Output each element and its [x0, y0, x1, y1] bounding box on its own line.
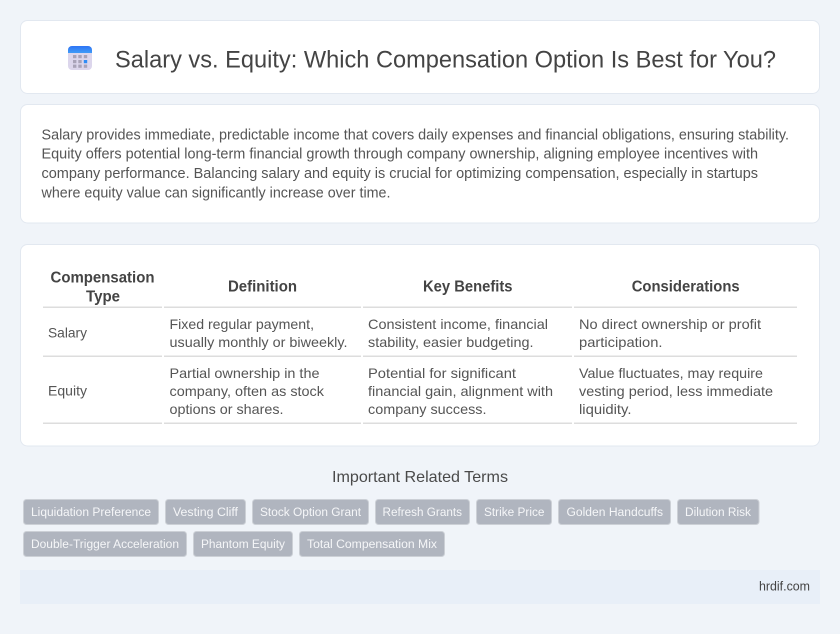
table row: salary: Fixed regular payment, [170, 316, 314, 332]
tag: double-trigger acceleration: Double-Trigger Acceleration [31, 537, 179, 551]
tag: stock option grant: Stock Option Grant [260, 505, 362, 519]
icon: calendar [68, 46, 92, 70]
tag: double-trigger acceleration [24, 532, 186, 556]
tag: strike price [476, 500, 552, 524]
table header row: Definition [228, 279, 297, 296]
text block: intro: Salary provides immediate, predictable income that covers daily expenses and financial obligations, ensuring stability. [42, 127, 789, 143]
tag: dilution risk [678, 500, 759, 524]
tag: refresh grants [376, 500, 470, 524]
table row: salary: Consistent income, financial [368, 316, 548, 332]
table row: equity: liquidity. [579, 401, 632, 417]
footer bar [20, 570, 820, 604]
tag: strike price: Strike Price [484, 505, 545, 519]
table row: equity: Potential for significant [368, 365, 516, 381]
footer source text: hrdif.com [759, 580, 810, 594]
table row: equity: options or shares. [170, 401, 284, 417]
table header row: Compensation [50, 270, 154, 287]
table header row: Type [86, 289, 120, 306]
text block: intro: where equity value can significantly increase over time. [41, 185, 391, 201]
tag: vesting cliff: Vesting Cliff [173, 505, 239, 519]
related terms tags [24, 500, 759, 556]
tag: phantom equity [194, 532, 292, 556]
table row: equity: company, often as stock [170, 383, 325, 399]
text block: intro [41, 127, 789, 201]
tag: refresh grants: Refresh Grants [382, 505, 462, 519]
table row: salary: No direct ownership or profit [579, 316, 761, 332]
text block: intro: Equity offers potential long-term financial growth through company ownership, aligning employee incentives with [42, 147, 758, 163]
table row: salary: participation. [579, 334, 662, 350]
tag: golden handcuffs [558, 500, 670, 524]
table row: salary: stability, easier budgeting. [368, 334, 534, 350]
table row: equity: Equity [48, 383, 87, 399]
tag: liquidation preference [24, 500, 158, 524]
table header row: Key Benefits [423, 279, 513, 296]
tag: golden handcuffs: Golden Handcuffs [566, 505, 663, 519]
tag: total compensation mix: Total Compensation Mix [307, 537, 438, 551]
title: Salary vs. Equity: Which Compensation Option Is Best for You? [115, 46, 776, 73]
table row: equity [43, 365, 797, 424]
panel: header [20, 20, 820, 94]
tag: total compensation mix [300, 532, 444, 556]
table row: equity: Value fluctuates, may require [579, 365, 763, 381]
tag: phantom equity: Phantom Equity [201, 537, 286, 551]
table row: equity: Partial ownership in the [170, 365, 320, 381]
tag: dilution risk: Dilution Risk [685, 505, 752, 519]
table row: salary: Salary [48, 325, 87, 341]
table row: equity: financial gain, alignment with [368, 383, 553, 399]
tag: stock option grant [252, 500, 368, 524]
table header row: Considerations [632, 279, 740, 296]
heading: important related terms: Important Related Terms [332, 469, 508, 486]
tag: liquidation preference: Liquidation Preference [31, 505, 151, 519]
text block: intro: company performance. Balancing salary and equity is crucial for optimizing compensation, especially in startups [42, 166, 758, 182]
table row: salary [43, 316, 797, 357]
table row: salary: usually monthly or biweekly. [170, 334, 348, 350]
panel: intro paragraph [20, 104, 820, 223]
table header row [43, 270, 797, 308]
tag: vesting cliff [166, 500, 246, 524]
panel: comparison table [20, 244, 820, 446]
table row: equity: company success. [368, 401, 486, 417]
table row: equity: vesting period, less immediate [579, 383, 773, 399]
